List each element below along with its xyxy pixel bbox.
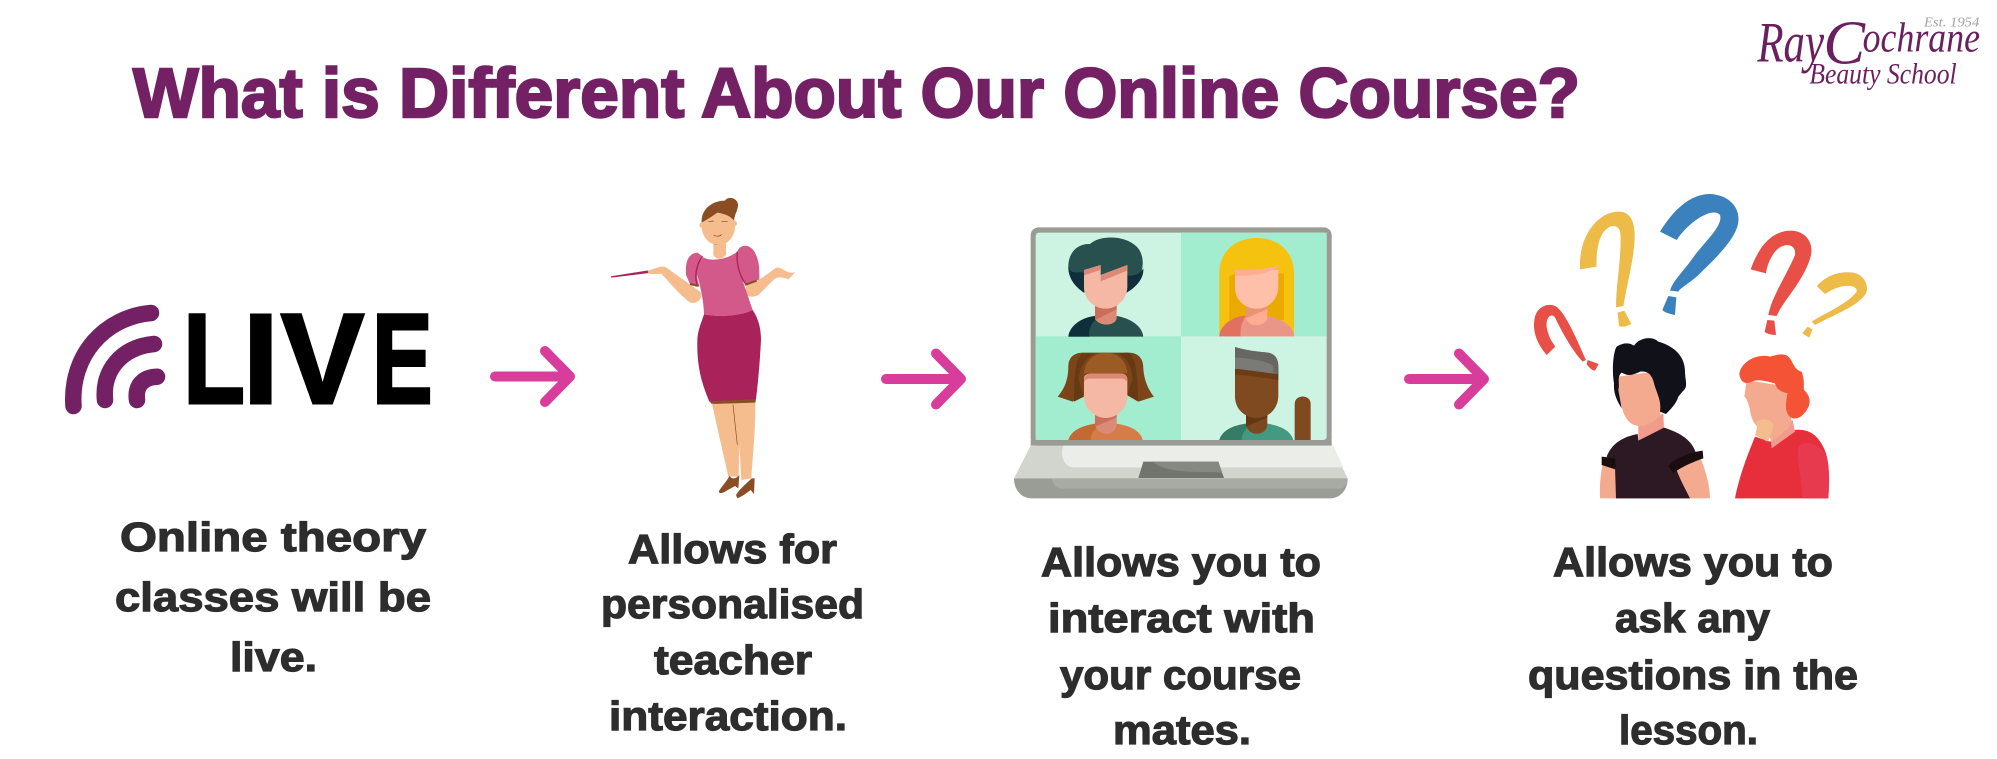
logo: Ray Cochrane Beauty School: Est. 1954 <box>1923 15 1980 30</box>
caption: personalised teacher interaction: teacher <box>654 637 812 683</box>
title: What is Different About Our Online Course? <box>133 54 1580 132</box>
caption: interact with course mates <box>1041 539 1321 753</box>
caption: online theory classes: classes will be <box>115 574 431 620</box>
caption: interact with course mates: mates. <box>1113 707 1251 753</box>
caption: personalised teacher interaction: Allows for <box>628 526 837 572</box>
caption: ask any questions in the lesson: questions in the <box>1528 652 1858 698</box>
arrow 2 <box>886 354 961 404</box>
caption: online theory classes <box>115 514 431 680</box>
logo: Ray Cochrane Beauty School: ochrane <box>1863 16 1980 62</box>
arrow 3 <box>1409 354 1484 404</box>
icon: teacher with pointer <box>611 198 796 498</box>
LIVE wordmark: L <box>183 288 245 431</box>
caption: ask any questions in the lesson <box>1528 539 1858 753</box>
logo: Ray Cochrane Beauty School: C <box>1823 9 1866 77</box>
caption: interact with course mates: Allows you to <box>1041 539 1321 585</box>
person 3 <box>1058 353 1154 440</box>
question marks <box>1534 194 1867 371</box>
icon: live signal arcs <box>73 313 157 406</box>
laptop base <box>1014 446 1348 478</box>
person 1 <box>1068 238 1143 337</box>
caption: online theory classes: live. <box>230 634 317 680</box>
caption: interact with course mates: interact with <box>1048 595 1315 641</box>
LIVE wordmark: V <box>281 288 364 431</box>
man with black hair <box>1600 338 1710 498</box>
panel: ask questions <box>1528 194 1867 753</box>
screen frame <box>1031 227 1332 446</box>
caption: personalised teacher interaction: interaction. <box>609 693 847 739</box>
caption: interact with course mates: your course <box>1060 652 1301 698</box>
arrow 1 <box>495 351 570 402</box>
icon: two people with question marks <box>1534 194 1867 498</box>
caption: ask any questions in the lesson: lesson. <box>1619 707 1758 753</box>
panel: live classes <box>73 288 433 680</box>
panel: course mates <box>1014 227 1348 753</box>
logo: Ray Cochrane Beauty School: Beauty School <box>1809 58 1957 90</box>
logo: Ray Cochrane Beauty School: Ray <box>1757 12 1824 75</box>
icon: laptop video call <box>1014 227 1348 498</box>
person 4 <box>1219 347 1311 440</box>
LIVE wordmark: I <box>243 288 279 431</box>
caption: online theory classes: Online theory <box>120 514 426 560</box>
caption: ask any questions in the lesson: Allows you to <box>1553 539 1833 585</box>
caption: ask any questions in the lesson: ask any <box>1615 595 1770 641</box>
man with red hair <box>1735 354 1829 498</box>
panel: teacher interaction <box>601 198 864 739</box>
caption: personalised teacher interaction: personalised <box>601 581 864 627</box>
LIVE wordmark: E <box>372 288 433 431</box>
logo: Ray Cochrane Beauty School <box>1757 9 1980 90</box>
person 2 <box>1219 238 1294 336</box>
caption: personalised teacher interaction <box>601 526 864 739</box>
